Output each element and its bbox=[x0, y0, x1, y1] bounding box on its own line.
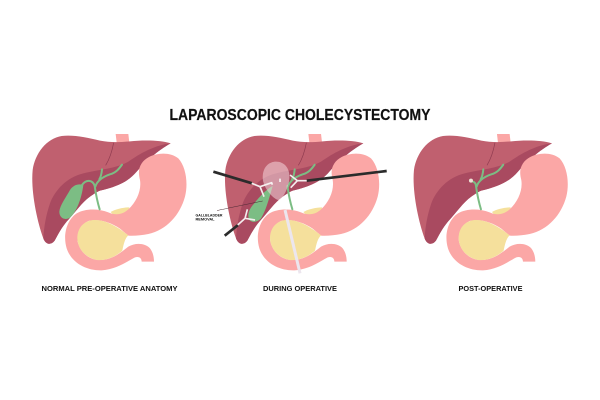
label: gallbladder removal: GALLBLADDER bbox=[196, 213, 223, 217]
panel: normal pre-operative anatomy bbox=[32, 134, 186, 270]
bile ducts bbox=[472, 165, 503, 209]
scope tube bbox=[285, 210, 300, 273]
stomach and duodenum bbox=[65, 154, 186, 270]
camera light glow bbox=[263, 162, 289, 200]
liver bbox=[225, 136, 363, 244]
stomach and duodenum bbox=[258, 154, 379, 270]
esophagus bbox=[497, 134, 511, 143]
liver bbox=[414, 136, 552, 244]
title: LAPAROSCOPIC CHOLECYSTECTOMY bbox=[170, 107, 431, 124]
pancreas top bbox=[492, 207, 511, 215]
bile ducts bbox=[287, 165, 315, 209]
instrument: left upper bbox=[213, 172, 272, 197]
instrument: lower left bbox=[225, 209, 255, 236]
gallbladder bbox=[248, 186, 273, 222]
pancreas bbox=[270, 220, 321, 260]
stomach and duodenum bbox=[446, 154, 568, 270]
pancreas top bbox=[303, 207, 322, 215]
caption: post-operative: POST-OPERATIVE bbox=[458, 284, 522, 293]
instrument: right bbox=[290, 171, 387, 188]
label: gallbladder removal bbox=[196, 213, 223, 222]
bile ducts bbox=[82, 165, 122, 209]
caption: normal pre-operative anatomy: NORMAL PRE-OPERATIVE ANATOMY bbox=[42, 284, 178, 293]
surgical clip bbox=[469, 179, 473, 183]
panel: during operative bbox=[213, 134, 387, 273]
pancreas bbox=[459, 220, 510, 260]
leader line bbox=[217, 201, 263, 211]
liver bbox=[32, 136, 171, 244]
pancreas bbox=[77, 220, 128, 260]
esophagus bbox=[116, 134, 129, 143]
gallbladder bbox=[59, 184, 83, 219]
surgical clips bbox=[271, 179, 280, 185]
esophagus bbox=[308, 134, 322, 143]
panel: post-operative bbox=[414, 134, 568, 270]
pancreas top bbox=[111, 207, 129, 215]
caption: during operative: DURING OPERATIVE bbox=[263, 284, 337, 293]
label: gallbladder removal: REMOVAL bbox=[196, 218, 215, 222]
